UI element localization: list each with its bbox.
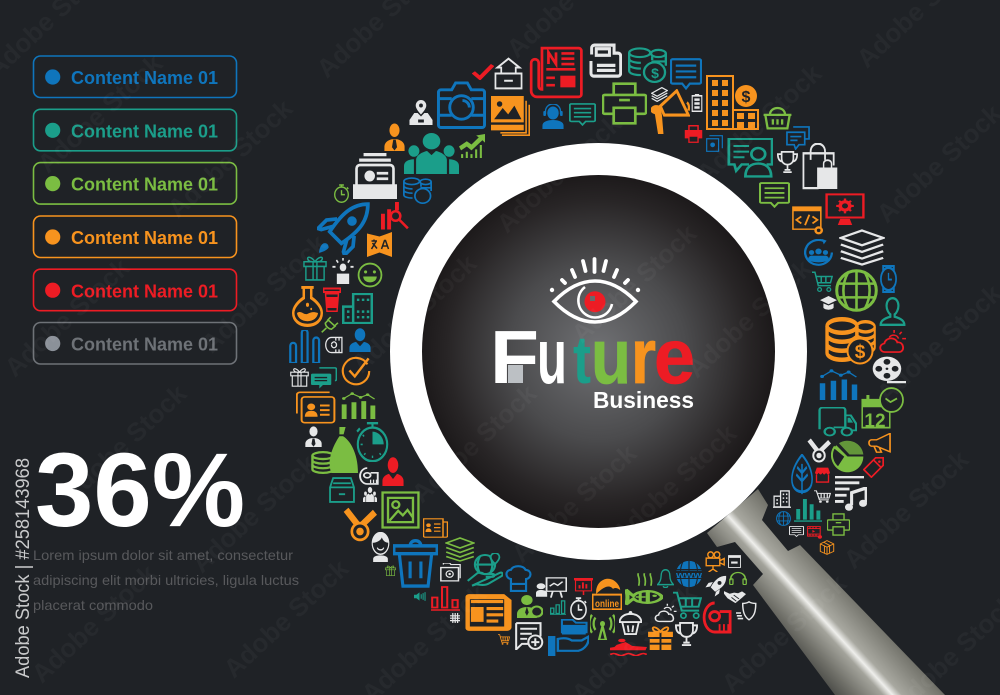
legend item teal: Content Name 01: [71, 121, 218, 141]
icon: chat bubbles: [311, 368, 336, 389]
icon: user gear: [517, 595, 542, 618]
icon: roll: [326, 337, 342, 353]
icon: tag: [864, 458, 883, 477]
legend item blue: [34, 56, 236, 98]
logo word future: t: [573, 322, 591, 398]
icon: megaphone large: [650, 91, 689, 134]
watermark: adobe stock: Adobe Stock: [26, 558, 163, 689]
icon: chat: [570, 104, 595, 125]
watermark: adobe stock: Adobe Stock: [196, 228, 333, 359]
icon: person: [349, 328, 371, 352]
icon: eye: [550, 259, 640, 322]
icon: cart white: [814, 491, 830, 503]
legend item teal: [34, 109, 236, 151]
icon: database money: [827, 319, 875, 364]
logo word future: u: [537, 312, 567, 400]
icon: graduation cap: [820, 296, 837, 310]
description text: placerat commodo: [33, 597, 153, 613]
icon: bell: [658, 570, 673, 588]
icon: businessman: [384, 124, 405, 151]
icon: truck: [820, 408, 856, 436]
icon: boy: [372, 533, 389, 562]
legend item gray: Content Name 01: [71, 335, 218, 355]
legend item red: Content Name 01: [71, 281, 218, 301]
icon: gift white: [291, 369, 308, 386]
legend item green: Content Name 01: [71, 175, 218, 195]
icon: video: [808, 527, 822, 539]
magnifying glass lens: [390, 143, 807, 560]
icon: antenna: [589, 615, 616, 640]
icon: bars base: [431, 587, 460, 610]
icon: database money: $: [855, 342, 866, 363]
icon: team circle: [805, 239, 832, 265]
icon: movie camera: [706, 552, 724, 572]
icon: gift small: [385, 566, 396, 576]
legend item blue: Content Name 01: [71, 68, 218, 88]
icon: pie chart: [832, 441, 863, 472]
icon: white chat: [789, 526, 804, 536]
icon: window: [729, 556, 740, 567]
icon: stopwatch: [335, 185, 348, 202]
icon: cupcake: [619, 611, 642, 634]
icon: www globe: www: [675, 570, 703, 580]
icon: tape measure: [360, 468, 378, 484]
watermark: adobe stock: Adobe Stock: [162, 93, 299, 224]
watermark: adobe stock: Adobe Stock: [838, 444, 975, 575]
icon: papers: [652, 88, 667, 101]
icon: image stack: [491, 96, 529, 135]
icon: shield money: [736, 602, 756, 620]
watermark: adobe stock: Adobe Stock: [716, 568, 853, 695]
icon: gift: [304, 257, 326, 280]
icon: user outline: [881, 298, 904, 325]
watermark: adobe stock: Adobe Stock: [32, 48, 169, 179]
icon: line bars: [342, 392, 375, 419]
icon: film reel: [873, 357, 906, 383]
icon: monitor gear: [827, 194, 863, 225]
icon: green printer: [827, 514, 850, 535]
icon: www globe: [675, 561, 703, 587]
icon: office building: $: [742, 89, 751, 106]
icon: online shop: online: [595, 599, 619, 610]
icon: online shop: [593, 579, 621, 610]
icon: calendar: [862, 395, 890, 432]
icon: leaf: [792, 455, 812, 494]
legend item orange: [34, 216, 236, 258]
description text: Lorem ipsum dolor sit amet, consectetur: [33, 547, 293, 563]
icon: news block: [465, 594, 512, 631]
icon: text list: [835, 477, 864, 501]
icon: coins: [404, 178, 431, 203]
icon: layers white: [841, 230, 883, 265]
icon: cup: [324, 288, 340, 312]
icon: growth chart: [459, 134, 485, 158]
icon: contact chat: [729, 139, 772, 176]
icon: plug: [322, 317, 338, 332]
magnifying glass handle: [707, 489, 945, 695]
icon: rocket white: [705, 576, 726, 597]
icon: newspaper: [531, 48, 581, 97]
icon: layers green: [446, 538, 474, 561]
description text: adipiscing elit morbi ultricies, ligula luctus: [33, 572, 299, 588]
icon: document printer: [591, 45, 621, 76]
icon: medal white: [807, 438, 831, 462]
icon: speaker: [414, 592, 425, 601]
icon: presentation: [574, 578, 593, 595]
icon: idea person: [332, 258, 354, 284]
icon: blue chat: [671, 59, 701, 88]
logo word future: [490, 312, 695, 400]
icon: blue line bars: [820, 369, 857, 400]
icon: cart teal: [673, 593, 701, 618]
icon: small globe: [777, 512, 790, 525]
icon: weather: [655, 604, 677, 621]
icon: chart search: [381, 202, 408, 229]
icon: inbox upload: [495, 59, 522, 88]
watermark: adobe stock: Adobe Stock: [346, 248, 483, 379]
icon: id news: [424, 519, 448, 537]
watermark: adobe stock: Adobe Stock: [491, 108, 628, 239]
watermark: adobe stock: Adobe Stock: [691, 58, 828, 189]
icon: code window: [793, 207, 822, 233]
icon: fish: [626, 589, 662, 605]
watermark: adobe stock: Adobe Stock: [56, 378, 193, 509]
icon: tape red: [704, 603, 730, 632]
icon: person white: [305, 426, 322, 447]
icon: picture frame: [383, 493, 418, 527]
icon: camera: [438, 83, 485, 128]
icon: teal bars: [794, 499, 822, 521]
icon: hand globe: [468, 553, 503, 586]
watermark: adobe stock: Adobe Stock: [186, 448, 323, 579]
icon: basket: [764, 108, 791, 128]
icon: teal coins: [629, 48, 666, 82]
watermark: adobe stock: Adobe Stock: [566, 218, 703, 349]
watermark: adobe stock: Adobe Stock: [606, 418, 743, 549]
icon: package: [820, 541, 834, 554]
icon: camera folder: [441, 563, 460, 581]
icon: teal coins: $: [651, 65, 659, 81]
icon: shopping bags: [803, 144, 837, 189]
icon: archive box: [330, 478, 354, 502]
icon: chef hat: [506, 566, 530, 591]
icon: trophy: [676, 623, 697, 645]
icon: translate: [367, 232, 392, 257]
icon: boat: [610, 639, 647, 656]
icon: music: [845, 488, 867, 511]
big percentage: 36%: [35, 432, 245, 549]
icon: trash: [394, 541, 437, 586]
icon: shop: [815, 468, 830, 482]
icon: video stack: [707, 136, 722, 151]
icon: rocket: [318, 204, 368, 255]
logo word future: u: [591, 312, 631, 400]
icon: stopwatch white: [571, 598, 586, 619]
icon: buildings: [343, 294, 372, 323]
icon: office: [773, 491, 791, 507]
icon: money bag: [330, 427, 358, 473]
icon: wrist watch: [881, 266, 896, 292]
stock id vertical text: Adobe Stock | #258143968: [13, 458, 34, 678]
icon: gift orange: [648, 627, 673, 650]
icon: calendar: 12: [864, 411, 886, 432]
logo: future business: [490, 259, 695, 413]
icon: teal cart: [812, 272, 832, 291]
icon: woman: [382, 457, 404, 486]
description text: [33, 547, 299, 613]
icon: green printer large: [603, 84, 646, 123]
icon: headphones: [730, 572, 746, 584]
watermark: adobe stock: Adobe Stock: [506, 438, 643, 569]
icon: id cards: [297, 392, 334, 423]
icon: check: [473, 65, 493, 78]
watermark: adobe stock: Adobe Stock: [681, 253, 818, 384]
icon: weather red: [880, 330, 906, 352]
icon: medal: [344, 508, 377, 540]
icon: smile: [359, 264, 381, 286]
icon: group: [404, 133, 459, 174]
icon: red printer: [685, 126, 702, 142]
icon: card file: [353, 153, 397, 199]
icon: map pin box: [409, 100, 433, 125]
icon: timer: [357, 423, 387, 461]
watermark: adobe stock: Adobe Stock: [0, 252, 136, 383]
logo word future: e: [654, 312, 695, 400]
legend: content names: [34, 56, 236, 364]
icon: battery: [692, 94, 702, 111]
logo word future: r: [631, 312, 656, 400]
icon: small bars: [550, 601, 566, 615]
icon: handshake: [724, 591, 746, 603]
icon: presenter: [536, 578, 567, 598]
icon: check circle: [343, 358, 369, 384]
icon: coin stack: [312, 452, 334, 473]
icon: small cart: [498, 635, 510, 645]
icon ring: [290, 45, 906, 656]
icon: globe: [837, 271, 876, 310]
icon: hash grid: [450, 613, 460, 623]
legend item red: [34, 269, 236, 311]
icon: blue chats: [787, 127, 809, 149]
icon: trophy small: [778, 152, 797, 172]
icon: clock: [880, 388, 903, 412]
icon: office building: [707, 76, 758, 129]
icon: green chat: [760, 183, 789, 207]
icon: bars outline: [290, 330, 319, 363]
icon: megaphone: [869, 433, 890, 452]
icon: headset agent: [542, 104, 564, 129]
legend item orange: Content Name 01: [71, 228, 218, 248]
watermark: adobe stock: Adobe Stock: [406, 378, 543, 509]
legend item gray: [34, 322, 236, 364]
logo word business: Business: [593, 387, 694, 413]
icon: hand folder: [548, 620, 588, 656]
icon: flask: [293, 287, 322, 325]
icon: people small: [363, 487, 377, 502]
icon: steam: [638, 573, 652, 586]
icon: note plus: [516, 623, 542, 649]
legend item green: [34, 163, 236, 204]
logo word future: F: [490, 315, 539, 399]
watermark: adobe stock: Adobe Stock: [218, 553, 355, 684]
